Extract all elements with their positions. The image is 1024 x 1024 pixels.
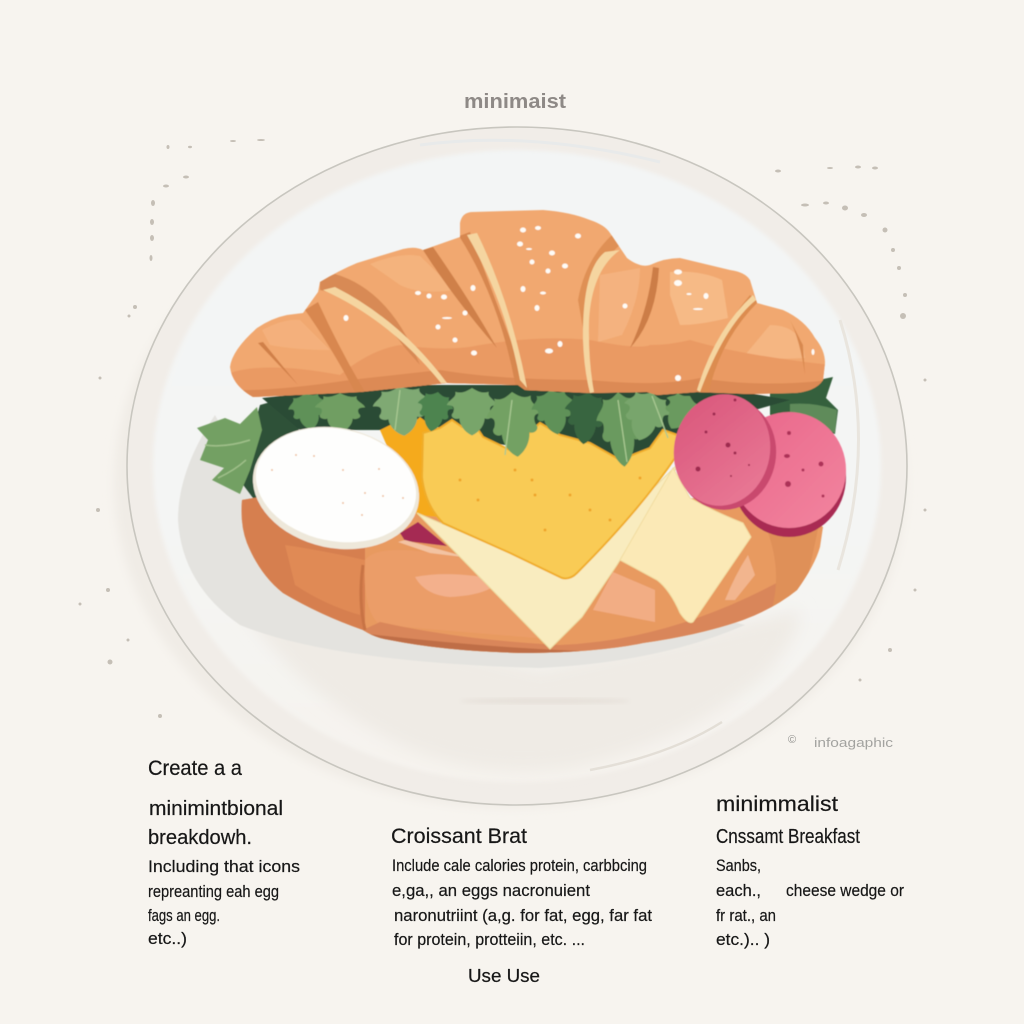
table shadow on plate bbox=[230, 590, 800, 771]
text block: left: repreanting eah egg bbox=[148, 882, 279, 901]
decorative dots: right bbox=[775, 166, 926, 682]
text block: right: Sanbs, bbox=[716, 856, 761, 875]
text block: right: each., bbox=[716, 881, 761, 900]
text block: left: Create a a bbox=[148, 757, 242, 780]
top croissant bbox=[220, 200, 840, 400]
text block: center: e,ga,, an eggs nacronuient bbox=[392, 881, 590, 900]
text block: right: minimmalist bbox=[716, 793, 838, 816]
egg yolk bbox=[422, 420, 683, 578]
heading: minimalist: minimaist bbox=[464, 91, 566, 113]
croissant cream folds bbox=[323, 233, 756, 393]
text block: center: naronutriint (a,g. for fat, egg, far fat bbox=[394, 906, 652, 925]
text block: center: Croissant Brat bbox=[391, 825, 527, 848]
light top highlights bbox=[670, 272, 728, 325]
sandwich shadow bbox=[178, 415, 745, 668]
text block: center: Include cale calories protein, carbbcing bbox=[392, 856, 647, 875]
text block: left: breakdowh. bbox=[148, 827, 252, 849]
sesame specks bbox=[344, 226, 814, 381]
bottom bun bbox=[240, 496, 824, 654]
text block: right: fr rat., an bbox=[716, 906, 776, 925]
text block: right: cheese wedge or bbox=[786, 881, 904, 900]
mid band bbox=[225, 338, 830, 400]
text block: left: etc..) bbox=[148, 929, 187, 948]
text block: center bbox=[391, 825, 652, 949]
watermark: © bbox=[788, 734, 796, 746]
yolk speckles bbox=[458, 468, 642, 532]
sandwich bbox=[197, 200, 846, 660]
cheese slice second bbox=[620, 468, 751, 623]
right lettuce bbox=[770, 377, 838, 434]
salami front slice bbox=[665, 387, 785, 518]
text block: right: etc.).. ) bbox=[716, 930, 770, 949]
watermark: infoagaphic bbox=[814, 735, 894, 750]
text block: left: minimintbional bbox=[149, 798, 283, 820]
low band bbox=[244, 370, 822, 398]
footer text: Use Use bbox=[468, 966, 540, 986]
text block: left: fags an egg. bbox=[148, 906, 220, 925]
egg white bbox=[241, 412, 431, 564]
hanging lettuce leaves bbox=[286, 383, 707, 469]
meat strip under egg bbox=[400, 522, 447, 546]
plate shadow accent bbox=[460, 698, 630, 704]
text block: left: Including that icons bbox=[148, 857, 300, 876]
plate bbox=[114, 127, 907, 808]
dark folds bbox=[320, 274, 420, 365]
yolk back orange bbox=[380, 415, 470, 520]
text block: right: Cnssamt Breakfast bbox=[716, 826, 860, 848]
text block: center: for protein, protteiin, etc. ... bbox=[394, 930, 585, 949]
lettuce dark base bbox=[262, 385, 790, 470]
text block: left bbox=[148, 757, 300, 948]
cheese slice main bbox=[417, 462, 680, 649]
text block: right bbox=[716, 793, 904, 949]
decorative dots: left bbox=[78, 139, 265, 718]
salami back slice bbox=[732, 412, 846, 537]
watermark bbox=[788, 734, 894, 750]
left lettuce bbox=[197, 395, 300, 510]
